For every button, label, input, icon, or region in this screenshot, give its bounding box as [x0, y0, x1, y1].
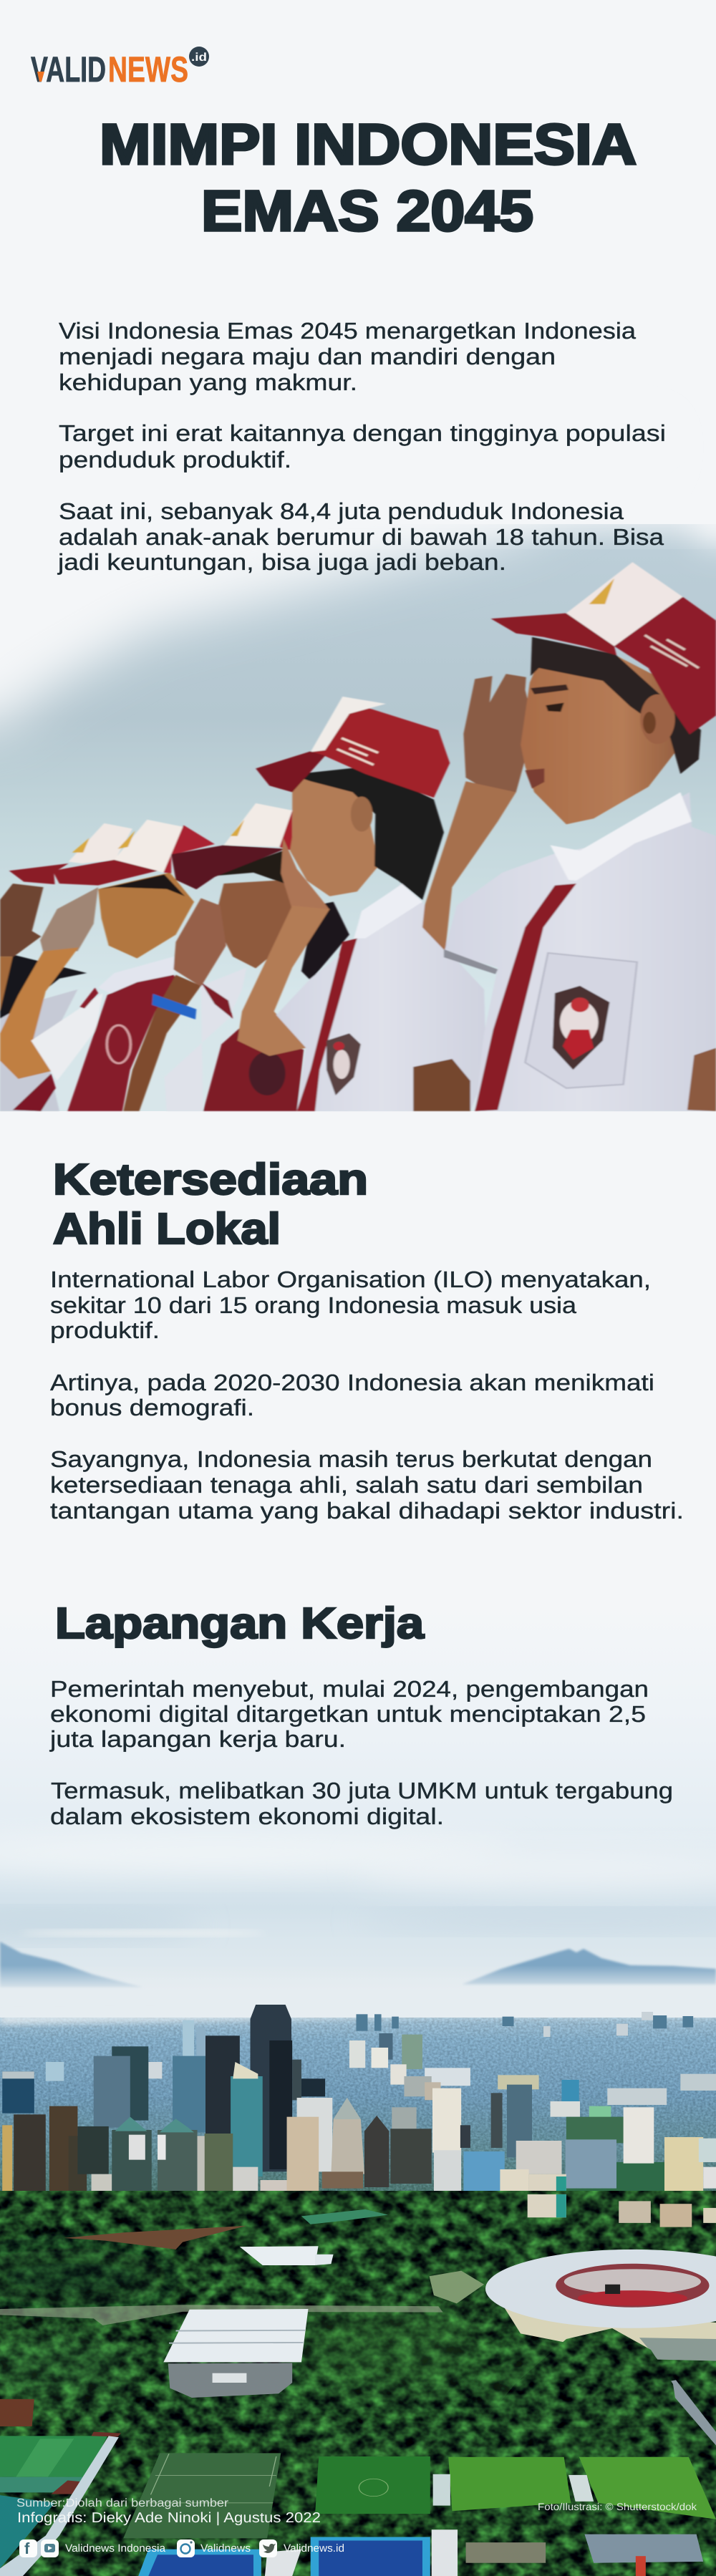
intro text: Saat ini, sebanyak 84,4 juta penduduk Indonesia	[59, 498, 624, 524]
intro text: Target ini erat kaitannya dengan tingginya populasi	[59, 420, 666, 446]
intro text: jadi keuntungan, bisa juga jadi beban.	[57, 549, 506, 575]
text: Ketersediaan Ahli Lokal body: Artinya, pada 2020-2030 Indonesia akan menikmati	[50, 1370, 654, 1395]
text: Lapangan Kerja body: Termasuk, melibatkan 30 juta UMKM untuk tergabung	[51, 1778, 673, 1803]
second child	[0, 820, 215, 1111]
courts	[138, 2529, 458, 2576]
social label: Validnews Indonesia: Validnews Indonesia	[65, 2542, 166, 2555]
icon: facebook: f	[24, 2539, 30, 2557]
logo: Validnews.id: .id	[191, 52, 207, 64]
text: Ketersediaan Ahli Lokal body	[50, 1267, 684, 1524]
heading: Ketersediaan Ahli Lokal	[53, 1155, 368, 1253]
right boy	[422, 562, 716, 1111]
title: EMAS 2045	[201, 179, 533, 243]
text: Ketersediaan Ahli Lokal body: tantangan utama yang bakal dihadapi sektor industri.	[50, 1498, 684, 1524]
city photo: sky, mountains, skyline, stadium, fields	[0, 1736, 716, 2576]
icon: twitter	[259, 2539, 277, 2557]
text: Lapangan Kerja body: ekonomi digital ditargetkan untuk menciptakan 2,5	[50, 1701, 646, 1727]
intro text: menjadi negara maju dan mandiri dengan	[59, 344, 556, 369]
third child	[123, 803, 304, 1111]
source credit: Sumber:Diolah dari berbagai sumber	[16, 2497, 229, 2509]
clouds	[0, 1837, 716, 1936]
text: Lapangan Kerja body	[49, 1676, 673, 1829]
football fields	[315, 2456, 716, 2519]
intro text: adalah anak-anak berumur di bawah 18 tahun. Bisa	[59, 524, 664, 550]
title: MIMPI INDONESIA	[100, 112, 637, 176]
infographic credit: Infografis: Dieky Ade Ninoki | Agustus 2022	[17, 2510, 321, 2526]
text: Ketersediaan Ahli Lokal body: International Labor Organisation (ILO) menyatakan,	[50, 1267, 651, 1292]
logo: Validnews.id: NEWS	[108, 49, 188, 89]
heading: Lapangan Kerja: Lapangan Kerja	[55, 1599, 425, 1647]
park trees	[0, 2191, 716, 2576]
text: Ketersediaan Ahli Lokal body: Sayangnya, Indonesia masih terus berkutat dengan	[50, 1446, 652, 1472]
hall roofs	[163, 2246, 334, 2398]
text: Lapangan Kerja body: juta lapangan kerja baru.	[49, 1726, 346, 1752]
icon: instagram	[177, 2539, 195, 2557]
text: Ketersediaan Ahli Lokal body: sekitar 10 dari 15 orang Indonesia masuk usia	[50, 1292, 576, 1318]
intro text: penduduk produktif.	[59, 447, 291, 473]
logo: Validnews.id: VALID	[31, 49, 106, 89]
text: Lapangan Kerja body: Pemerintah menyebut, mulai 2024, pengembangan	[50, 1676, 649, 1702]
heading: Ketersediaan Ahli Lokal: Ahli Lokal	[53, 1204, 281, 1253]
mountains	[0, 1942, 716, 1987]
text: Ketersediaan Ahli Lokal body: bonus demografi.	[50, 1395, 254, 1420]
far left child	[0, 823, 132, 1111]
city band	[0, 2009, 716, 2240]
icon: youtube	[41, 2539, 59, 2557]
text: Ketersediaan Ahli Lokal body: produktif.	[50, 1317, 160, 1343]
left field	[0, 2432, 121, 2576]
social label: Validnews.id: Validnews.id	[284, 2542, 344, 2555]
text: Ketersediaan Ahli Lokal body: ketersediaan tenaga ahli, salah satu dari sembilan	[50, 1472, 643, 1498]
icon: facebook	[19, 2539, 37, 2557]
intro text: kehidupan yang makmur.	[59, 369, 357, 395]
rugby field	[123, 2453, 281, 2538]
stadium	[485, 2250, 716, 2360]
park features: stadium, halls, fields	[0, 2194, 716, 2576]
title	[100, 112, 637, 243]
skyscrapers	[2, 2005, 716, 2219]
middle girl	[238, 697, 486, 1111]
text: Lapangan Kerja body: dalam ekosistem ekonomi digital.	[50, 1803, 444, 1829]
social label: Validnews: Validnews	[200, 2542, 251, 2555]
photo credit: Foto/Ilustrasi: © Shutterstock/dok	[538, 2501, 697, 2512]
intro text: Visi Indonesia Emas 2045 menargetkan Indonesia	[59, 318, 636, 344]
heading: Ketersediaan Ahli Lokal: Ketersediaan	[53, 1155, 368, 1204]
intro text	[57, 318, 666, 575]
logo: Validnews.id	[31, 47, 209, 89]
photo: schoolchildren saluting	[0, 444, 716, 1111]
